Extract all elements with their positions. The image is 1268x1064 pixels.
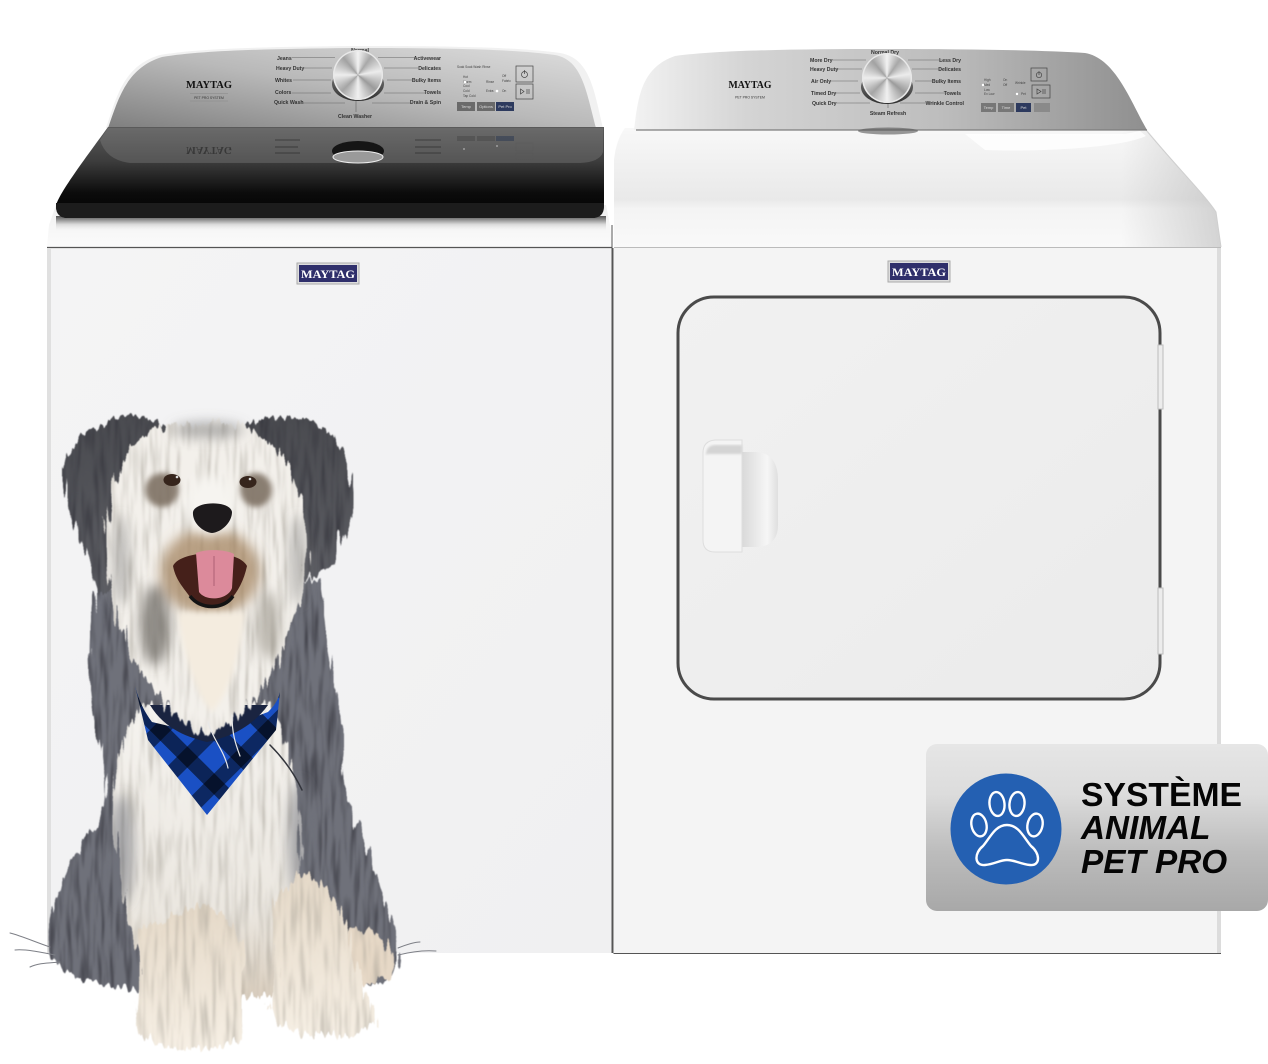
washer dial labels: Heavy Duty — [276, 66, 304, 72]
washer buttons — [457, 102, 514, 111]
dryer dial labels: Timed Dry — [811, 91, 836, 97]
washer dial labels: Quick Wash — [274, 100, 304, 106]
washer dial labels: Towels — [424, 90, 441, 96]
dryer hinges — [1158, 345, 1163, 654]
dryer dial — [862, 53, 912, 103]
washer brand text: PET PRO SYSTEM — [194, 96, 224, 100]
dog chest side shading — [110, 780, 312, 905]
washer dial labels: Delicates — [418, 66, 441, 72]
icon: paw in blue circle — [950, 774, 1062, 884]
washer brand text — [186, 80, 232, 101]
dryer cycle options: Wrinkle — [1015, 81, 1026, 85]
shadow under lid — [56, 216, 606, 231]
washer cycle options: Cool — [463, 84, 470, 88]
washer cycle options: Tap Cold — [463, 94, 476, 98]
washer cycle options: Off — [502, 74, 506, 78]
washer dial labels: Normal — [351, 48, 369, 54]
dryer cycle options: Med — [984, 83, 990, 87]
dog muzzle highlight — [184, 475, 236, 535]
dial shadow on deck — [858, 128, 918, 134]
dryer dial labels: Steam Refresh — [870, 111, 906, 117]
dryer dial labels: Quick Dry — [812, 101, 837, 107]
dryer buttons — [981, 103, 1050, 112]
washer buttons: Temp — [461, 104, 472, 109]
washer control panel — [106, 46, 603, 128]
dryer door — [678, 297, 1160, 699]
dog body — [48, 580, 399, 990]
dog beard — [178, 612, 245, 712]
washer buttons: Pet Pro — [498, 104, 512, 109]
dryer handle — [703, 440, 778, 552]
dryer cabinet — [614, 248, 1221, 953]
washer cycle options: On — [502, 89, 506, 93]
dryer badge — [888, 261, 950, 282]
dog bandana — [135, 686, 280, 815]
washer deck — [47, 205, 612, 247]
badge text: PET PRO — [1081, 844, 1227, 881]
dog eye surrounds — [145, 473, 272, 507]
dryer — [613, 49, 1221, 954]
washer — [47, 46, 612, 953]
washer cycle options: Hot — [463, 75, 468, 79]
lid reflection of panel: MAYTAG — [186, 144, 232, 155]
washer dial labels: Colors — [275, 90, 292, 96]
dryer cycle options: High — [984, 78, 991, 82]
dryer dial labels: Delicates — [938, 67, 961, 73]
dryer dial labels: Heavy Duty — [810, 67, 838, 73]
washer glass lid — [56, 127, 604, 218]
dryer buttons: Temp — [984, 105, 994, 110]
dryer dial labels: Wrinkle Control — [925, 101, 965, 107]
dryer cycle options: Off — [1003, 83, 1007, 87]
washer cycle options: Fabric — [502, 79, 511, 83]
washer dial labels: Jeans — [277, 56, 292, 62]
dog left ear — [64, 417, 175, 595]
dryer badge: MAYTAG — [892, 267, 946, 279]
dog mouth — [173, 550, 247, 608]
dog left front leg — [136, 905, 243, 1049]
washer dial — [333, 50, 383, 100]
dryer top deck — [614, 128, 1221, 247]
washer badge: MAYTAG — [301, 269, 355, 281]
washer cycle options: Cold — [463, 89, 470, 93]
dog fur wisps — [10, 715, 436, 967]
washer dial labels — [274, 48, 441, 120]
washer cycle options: Soak Soak Wash Rinse — [457, 65, 491, 69]
washer badge — [297, 263, 359, 284]
dog eyes — [164, 474, 256, 488]
dryer buttons: Pet — [1020, 105, 1027, 110]
washer cycle options — [457, 65, 511, 98]
badge text — [1080, 776, 1242, 881]
badge background — [926, 744, 1268, 911]
dog right ear — [235, 417, 353, 590]
washer dial labels: Bulky Items — [412, 78, 441, 84]
lid reflection of dial — [332, 141, 384, 161]
dryer dial labels: Bulky Items — [932, 79, 961, 85]
washer cycle options: Extra — [486, 89, 494, 93]
badge text: SYSTÈME — [1081, 776, 1242, 814]
washer brand text: MAYTAG — [186, 80, 232, 91]
dryer dial skirt — [861, 70, 913, 104]
dog right front leg — [268, 875, 375, 1036]
lid window reflection — [965, 131, 1146, 150]
washer cabinet — [47, 248, 612, 953]
dryer dial labels — [810, 50, 965, 117]
dryer control panel — [634, 49, 1147, 130]
dryer cycle options: On — [1003, 78, 1007, 82]
lid reflection of panel — [186, 136, 533, 160]
dryer dial labels: Less Dry — [939, 58, 961, 64]
dryer dial labels: Normal Dry — [871, 50, 899, 56]
dryer dial labels: Air Only — [811, 79, 831, 85]
dryer cycle options: Pet — [1021, 92, 1026, 96]
dog head mane — [106, 423, 307, 735]
washer power and start icons — [516, 66, 533, 99]
washer dial labels: Clean Washer — [338, 114, 372, 120]
dryer brand text — [728, 80, 772, 100]
dryer brand text: PET PRO SYSTEM — [735, 96, 765, 100]
dog face shading — [113, 422, 306, 665]
washer cycle options: Warm — [463, 80, 472, 84]
dryer dial labels: Towels — [944, 91, 961, 97]
dryer cycle options — [982, 78, 1026, 96]
washer dial labels: Activewear — [414, 56, 441, 62]
dog right haunch — [340, 929, 396, 983]
badge text: ANIMAL — [1080, 810, 1210, 847]
washer dial skirt — [332, 67, 384, 101]
dryer dial labels: More Dry — [810, 58, 833, 64]
dryer cycle options: Low — [984, 88, 991, 92]
washer buttons: Options — [479, 104, 493, 109]
dryer buttons: Time — [1002, 105, 1011, 110]
washer cycle options: Rinse — [486, 80, 494, 84]
dryer brand text: MAYTAG — [728, 80, 772, 91]
dog chest and belly — [113, 705, 300, 1000]
washer dial labels: Drain & Spin — [410, 100, 441, 106]
dryer cycle options: Ex Low — [984, 92, 995, 96]
dog nose — [193, 503, 232, 533]
washer dial labels: Whites — [275, 78, 292, 84]
dryer power and start icons — [1031, 68, 1050, 98]
